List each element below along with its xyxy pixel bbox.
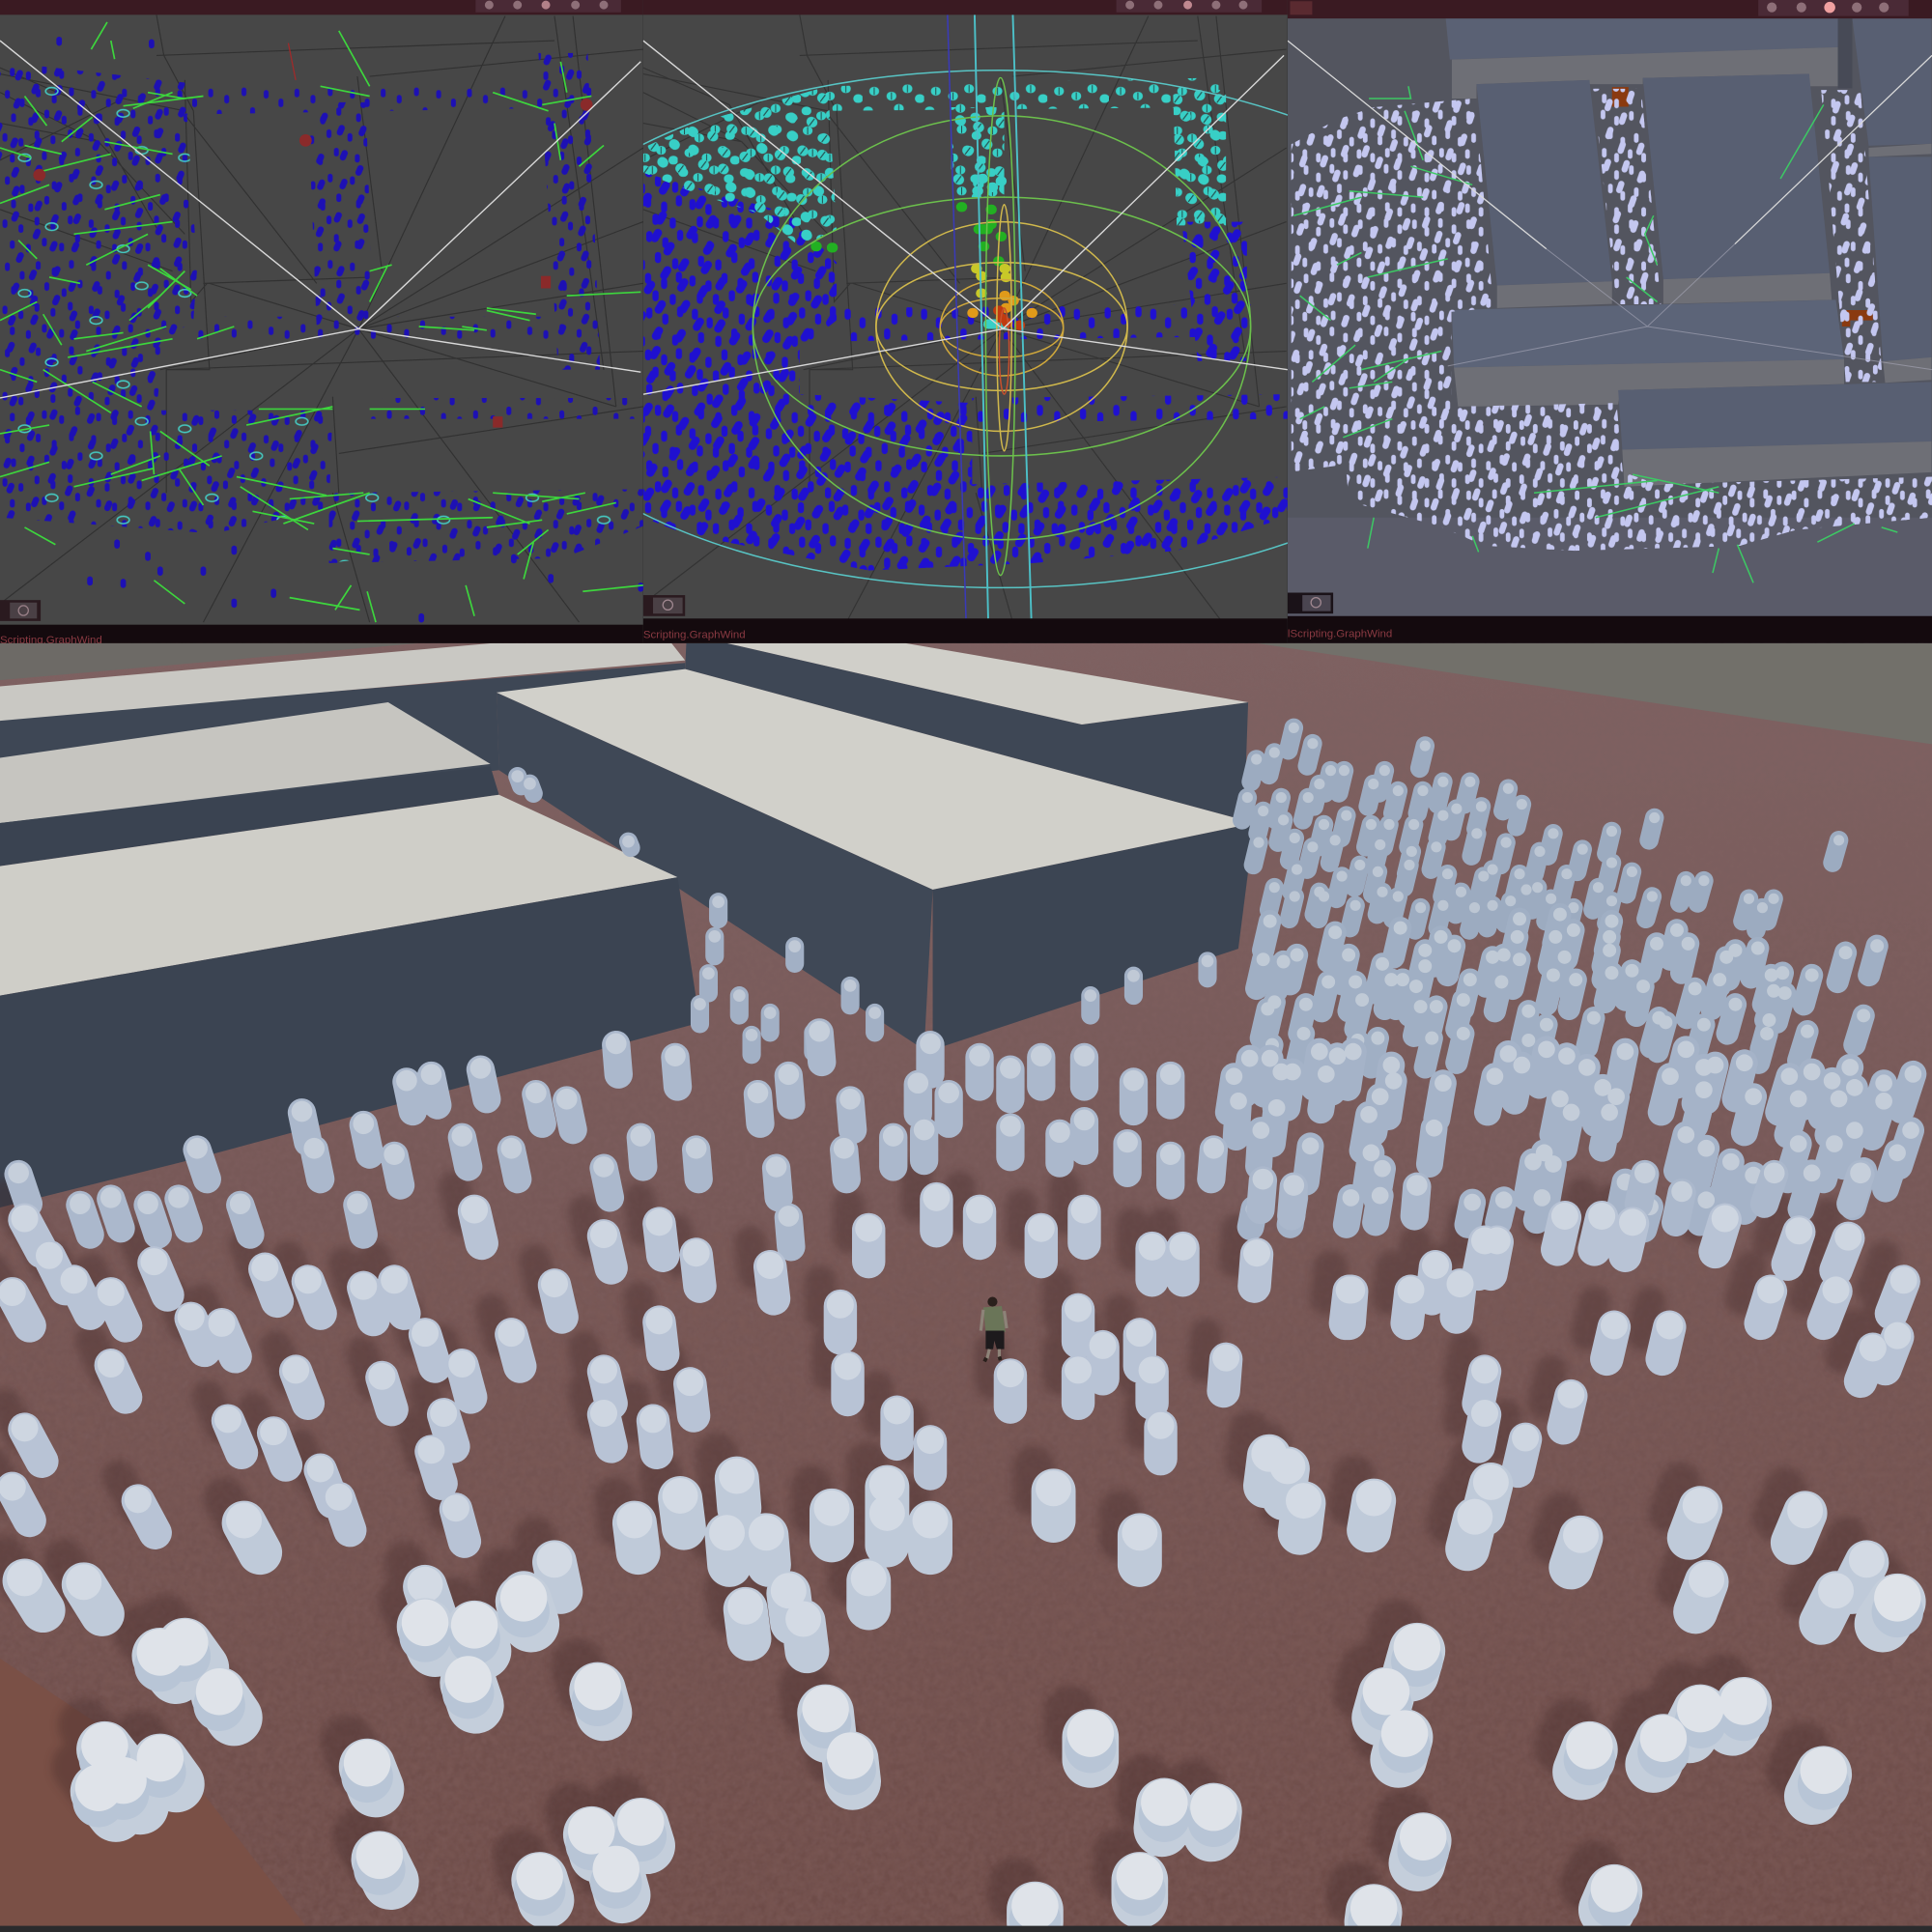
scene button bbox=[1288, 593, 1333, 613]
lilac agents bbox=[1292, 89, 1932, 551]
panel: distance-band rings view bbox=[491, 0, 1511, 643]
toolbar bbox=[643, 0, 1288, 14]
panel: 3D crowd scene bbox=[0, 643, 1932, 1932]
cyan agents bbox=[643, 77, 1226, 246]
agent clusters bbox=[0, 40, 643, 620]
crowd: large capsules bbox=[13, 1198, 1904, 1542]
scene button bbox=[643, 595, 685, 616]
velocity vectors bbox=[0, 22, 643, 622]
origin axes bbox=[0, 41, 640, 398]
velocity vectors bbox=[1293, 86, 1897, 582]
origin axes bbox=[643, 41, 1288, 394]
building footprints bbox=[1446, 18, 1932, 487]
green, yellow and red central agents bbox=[815, 179, 1033, 326]
ground plane bbox=[0, 643, 1932, 1932]
crowd: small capsules bbox=[518, 777, 1208, 1055]
far crowd bbox=[1229, 727, 1913, 1230]
panel: cost-field debug view with agent trajectories bbox=[0, 0, 643, 646]
crowd: nearest capsules bbox=[99, 1598, 1897, 1932]
crowd: near capsules bbox=[25, 1454, 1866, 1654]
bottom edge bbox=[0, 1926, 1932, 1932]
status bar: Scripting.GraphWind bbox=[643, 630, 746, 641]
buildings bbox=[0, 643, 1254, 1208]
blue agents bbox=[643, 173, 1288, 571]
status bar bbox=[643, 618, 1288, 643]
status bar bbox=[0, 625, 643, 646]
toolbar bbox=[0, 0, 643, 14]
player character bbox=[980, 1296, 1007, 1361]
status bar: lScripting.GraphWind bbox=[1288, 628, 1392, 639]
toolbar bbox=[1288, 0, 1932, 18]
crowd: medium capsules bbox=[18, 1032, 1861, 1247]
origin axes bbox=[1288, 41, 1932, 249]
scene button bbox=[0, 600, 41, 621]
status bar: Scripting.GraphWind bbox=[0, 635, 102, 646]
status bar bbox=[1288, 616, 1932, 643]
capsule shadows bbox=[0, 1175, 1884, 1897]
panel: top-down navmesh view bbox=[1288, 0, 1932, 643]
range rings bbox=[491, 14, 1511, 618]
red markers bbox=[33, 43, 593, 428]
